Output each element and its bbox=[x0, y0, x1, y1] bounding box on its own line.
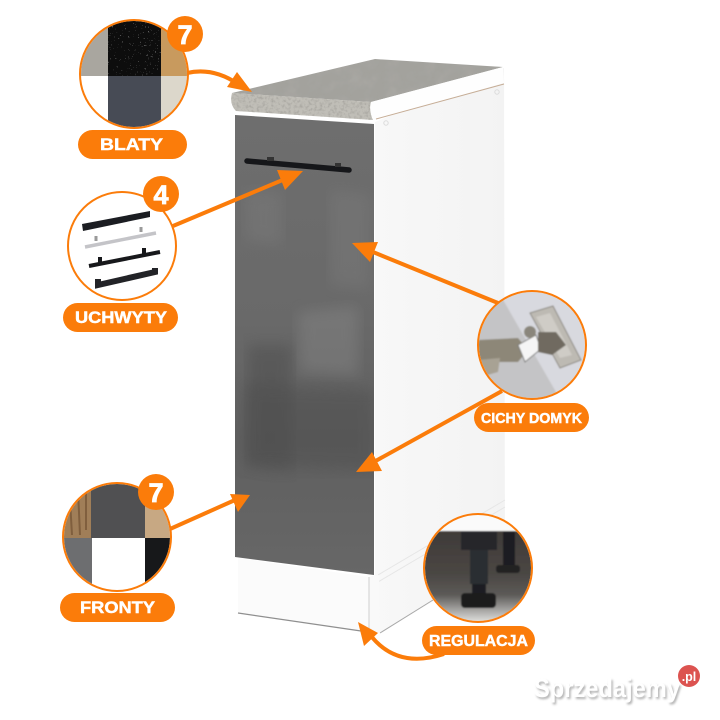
arrow: handle bbox=[173, 170, 303, 226]
badge: 7 bbox=[138, 474, 174, 510]
panel: cichy domyk bbox=[474, 291, 589, 432]
circle with handle samples bbox=[68, 192, 176, 300]
label: uchwyty bbox=[63, 303, 178, 332]
panel: uchwyty bbox=[63, 176, 179, 332]
circle outline bbox=[63, 483, 171, 591]
plinth bbox=[238, 558, 380, 633]
door handle bbox=[247, 157, 349, 170]
swatches: worktops bbox=[80, 20, 191, 130]
badge: 7: 7 bbox=[148, 478, 164, 508]
arrow: plinth bbox=[358, 622, 444, 659]
adjustable foot photo bbox=[424, 514, 532, 622]
watermark: Sprzedajemy bbox=[534, 673, 680, 703]
label: regulacja bbox=[422, 626, 535, 655]
panel: regulacja bbox=[422, 514, 535, 655]
label: fronty bbox=[60, 593, 175, 622]
arrow: worktop bbox=[187, 71, 252, 92]
panel: blaty bbox=[78, 16, 203, 159]
label: cichy domyk: CICHY DOMYK bbox=[481, 411, 583, 427]
label: blaty: BLATY bbox=[100, 135, 164, 154]
watermark: .pl bbox=[682, 670, 696, 684]
arrow: lower hinge bbox=[356, 391, 502, 472]
swatches: fronts bbox=[64, 484, 170, 584]
circle outline bbox=[424, 514, 532, 622]
hinge photo bbox=[478, 291, 586, 399]
side panel plinth seam bbox=[378, 500, 505, 582]
label: cichy domyk bbox=[474, 403, 589, 432]
badge: 7: 7 bbox=[177, 20, 193, 50]
door front bbox=[235, 115, 374, 575]
badge: 4: 4 bbox=[153, 180, 169, 210]
label: regulacja: REGULACJA bbox=[429, 633, 528, 650]
arrow: upper hinge bbox=[352, 242, 498, 303]
label: fronty: FRONTY bbox=[80, 598, 156, 617]
arrow: front bbox=[170, 494, 250, 529]
label: uchwyty: UCHWYTY bbox=[75, 308, 168, 327]
worktop bbox=[231, 59, 504, 125]
cabinet bbox=[231, 59, 505, 633]
panel: fronty bbox=[60, 474, 175, 622]
cabinet side panel bbox=[369, 68, 505, 633]
label: blaty bbox=[78, 130, 187, 159]
side floor edge bbox=[380, 600, 433, 633]
circle outline bbox=[80, 20, 188, 128]
badge: 4 bbox=[143, 176, 179, 212]
circle outline bbox=[478, 291, 586, 399]
badge: 7 bbox=[167, 16, 203, 52]
watermark: Sprzedajemy bbox=[536, 675, 682, 705]
